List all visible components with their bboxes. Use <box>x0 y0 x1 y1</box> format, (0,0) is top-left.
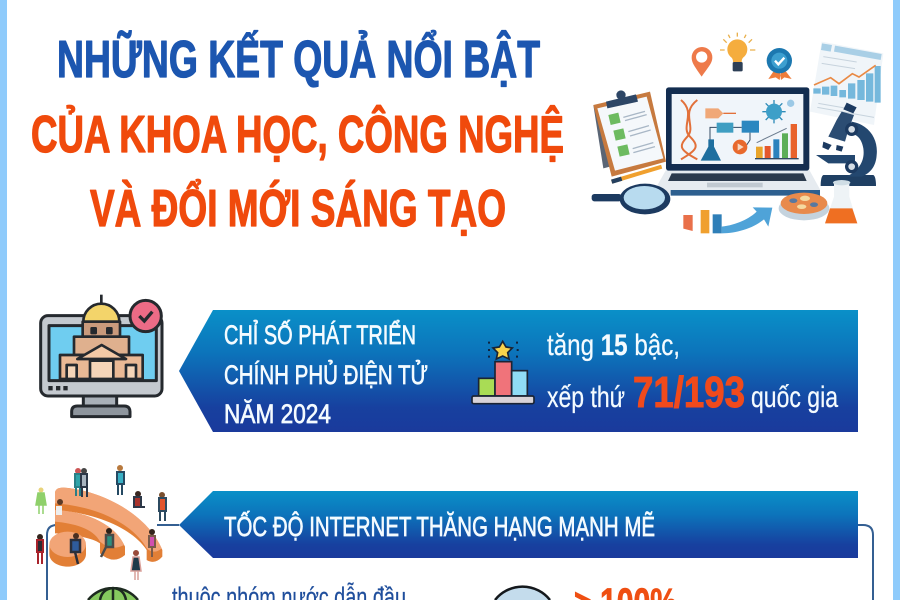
microscope <box>816 103 877 186</box>
icon: podium with star <box>472 341 534 404</box>
icon: green globe <box>88 588 138 600</box>
dots <box>48 386 68 390</box>
screen: bar chart <box>755 124 799 159</box>
clipboard <box>593 90 666 182</box>
right page border <box>893 0 900 600</box>
petri dish <box>779 193 829 220</box>
small bars and arrow <box>683 207 772 233</box>
title <box>31 30 564 238</box>
screen: virus <box>762 100 794 123</box>
icon: location pin <box>692 47 712 77</box>
section 1 icon: government building on monitor <box>41 295 162 417</box>
icon: award badge <box>767 48 792 80</box>
section 2 outline connector <box>47 525 873 600</box>
document: growth chart <box>810 42 883 125</box>
section 2 icon: wifi symbol with people <box>36 465 166 580</box>
section 1 banner <box>179 310 858 432</box>
title: VÀ ĐỔI MỚI SÁNG TẠO <box>90 179 506 238</box>
laptop <box>655 87 820 196</box>
screen: flowchart <box>705 108 759 154</box>
section 2 banner <box>179 491 858 558</box>
section 1 heading: NĂM 2024 <box>224 399 331 429</box>
people <box>36 465 166 580</box>
left page border <box>0 0 7 600</box>
section 1 heading: CHÍNH PHỦ ĐIỆN TỬ <box>224 358 428 390</box>
check badge <box>130 300 161 332</box>
screen: DNA helix <box>681 100 697 159</box>
title: CỦA KHOA HỌC, CÔNG NGHỆ <box>31 105 564 164</box>
section 1 heading <box>224 318 428 429</box>
section 1 result text <box>547 329 838 417</box>
magnifying glass <box>592 184 670 214</box>
screen: flask <box>701 139 721 161</box>
illustration: laptop and science tools <box>592 33 883 233</box>
building <box>60 295 143 379</box>
section 1 heading: CHỈ SỐ PHÁT TRIỂN <box>224 318 416 350</box>
section 1 result text: xếp thứ <box>547 381 625 414</box>
icon: light bulb <box>720 33 755 71</box>
section 1 result text: quốc gia <box>751 381 838 414</box>
flask <box>825 180 857 223</box>
icon: speed gauge circle <box>495 587 550 600</box>
section 1 result text: tăng 15 bậc, <box>547 329 680 362</box>
section 1 result text: 71/193 <box>633 368 745 417</box>
wifi symbol <box>49 488 162 567</box>
section 2 heading: TỐC ĐỘ INTERNET THĂNG HẠNG MẠNH MẼ <box>224 510 655 542</box>
title: NHỮNG KẾT QUẢ NỔI BẬT <box>57 30 540 89</box>
monitor <box>41 316 162 417</box>
